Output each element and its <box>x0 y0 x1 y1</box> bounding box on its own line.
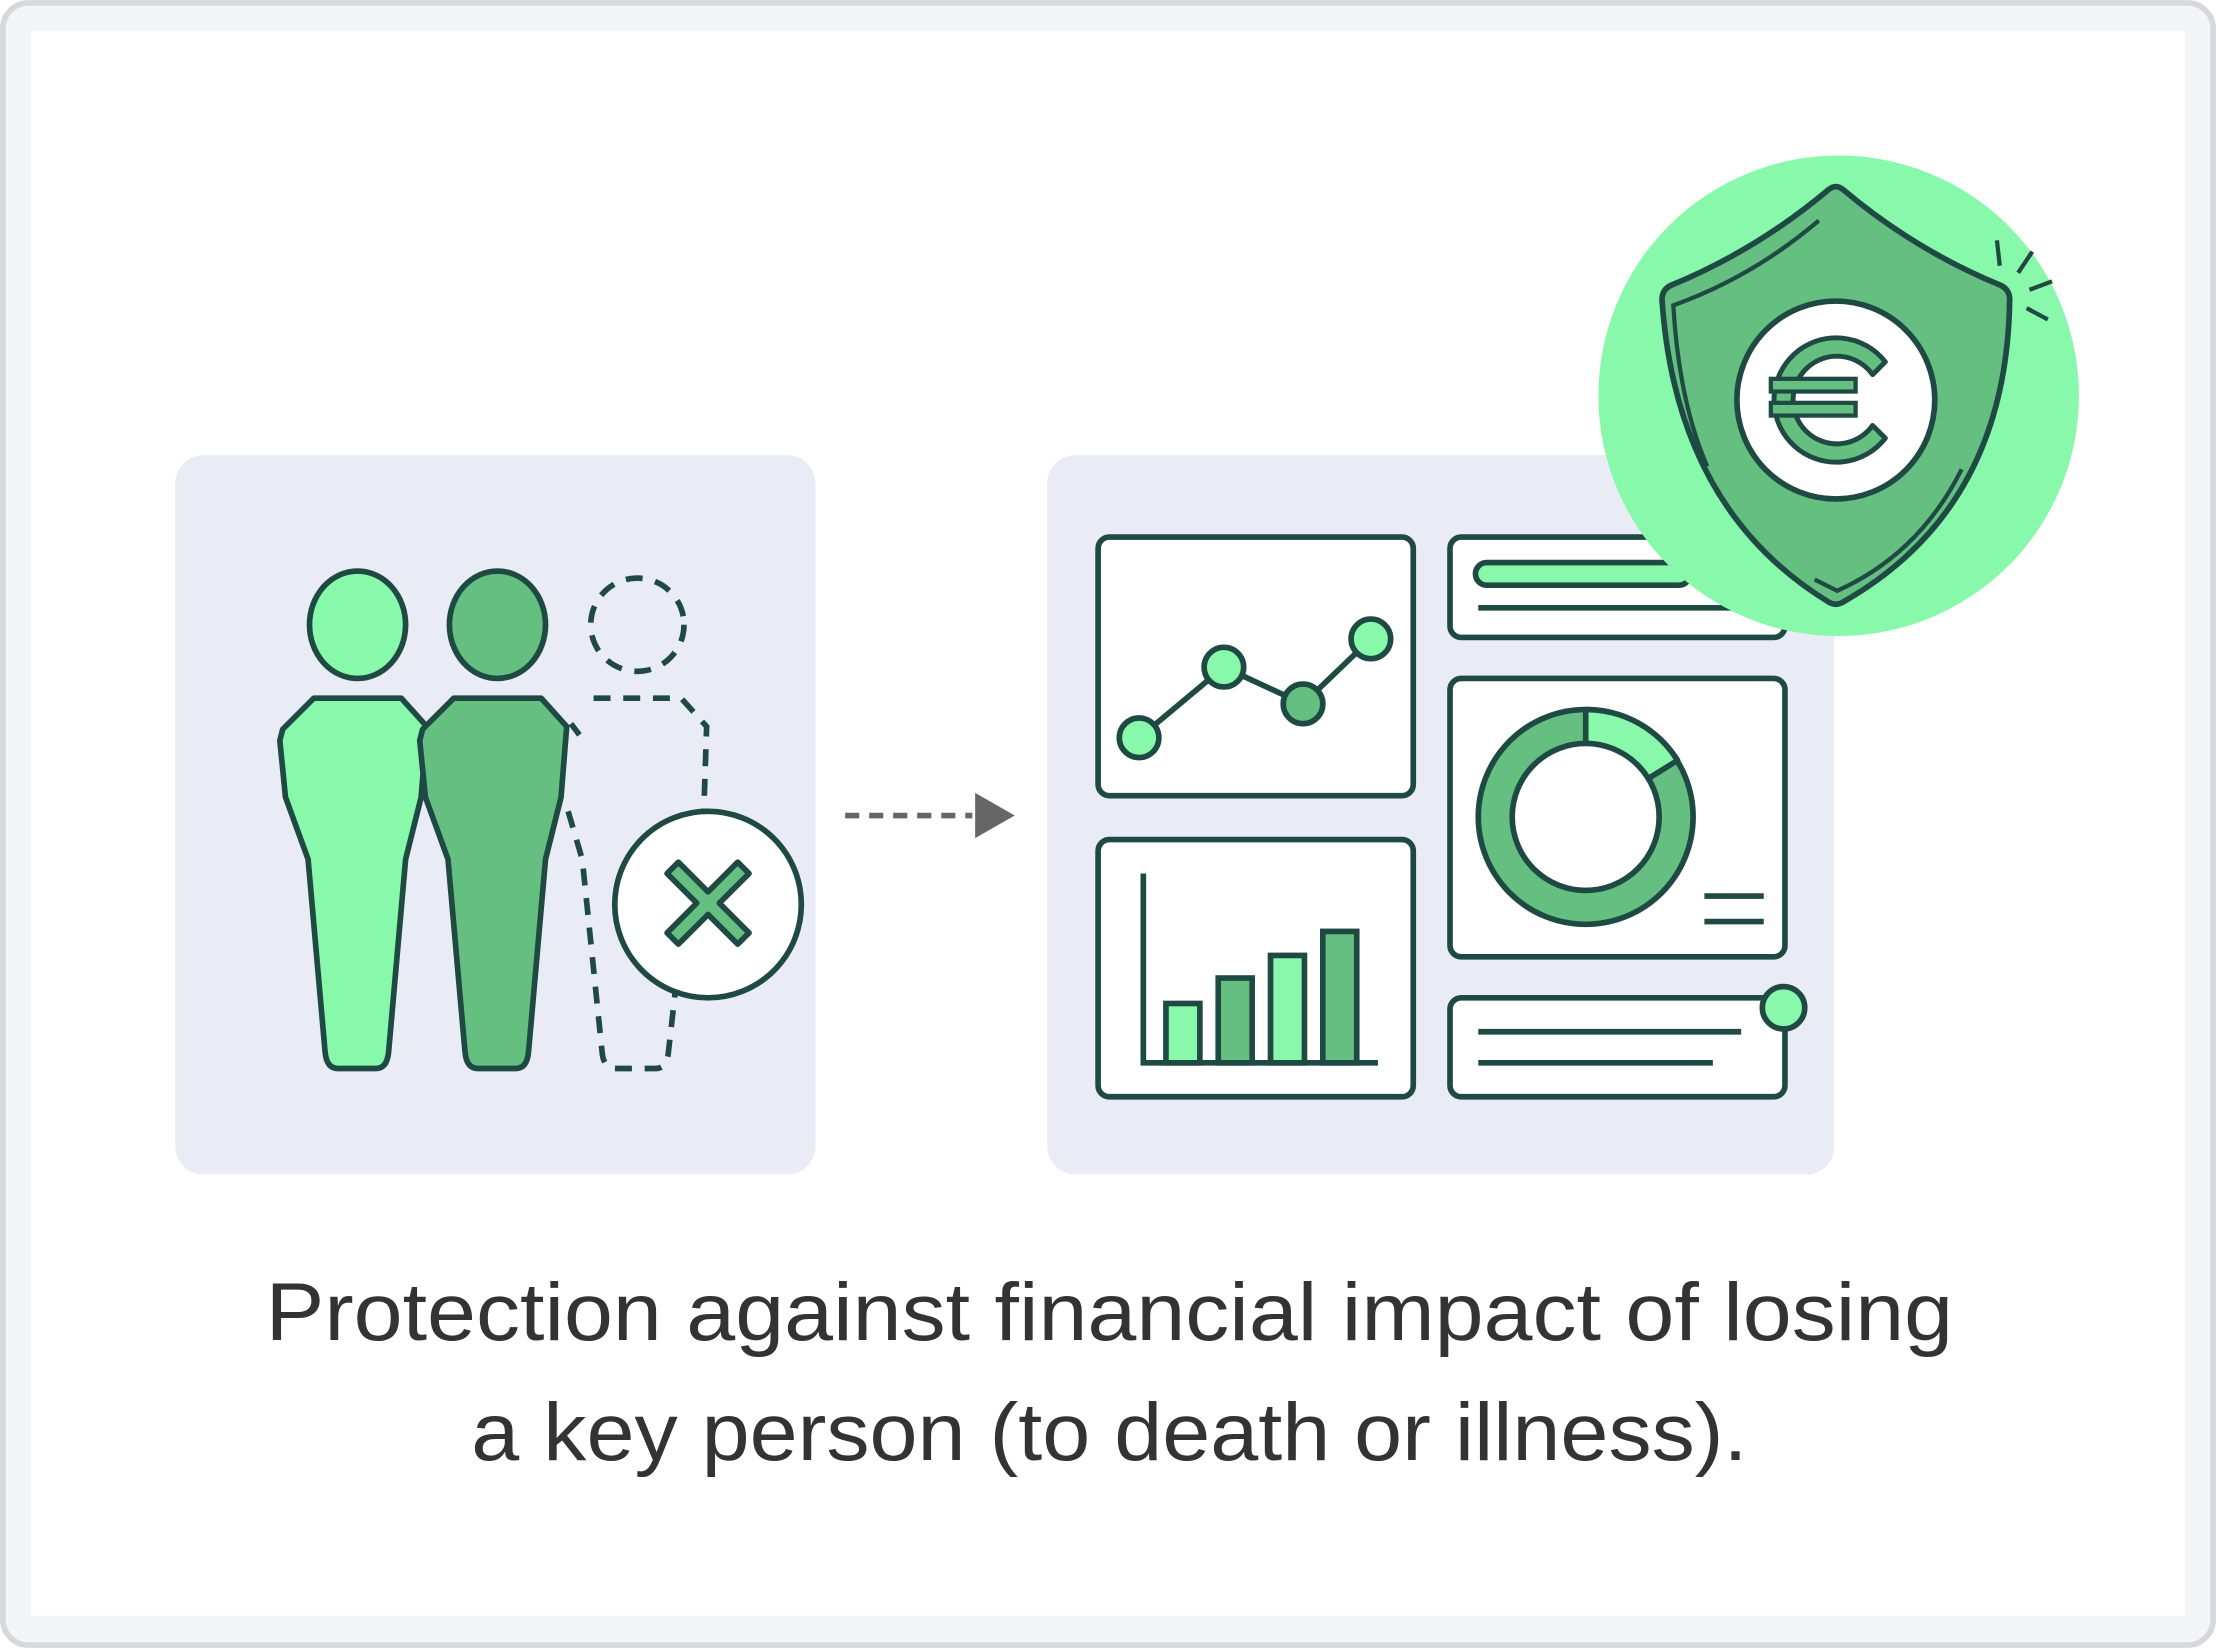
card: text lines with dot <box>1450 987 1805 1097</box>
card: bar chart <box>1098 840 1413 1097</box>
caption: a key person (to death or illness). <box>471 1387 1748 1478</box>
panel: team with lost key person <box>175 455 815 1174</box>
icon: missing person (dashed) <box>568 578 707 1068</box>
card: donut chart <box>1450 678 1785 957</box>
icon: removal X <box>615 811 801 998</box>
icon: person 2 <box>420 571 567 1068</box>
card: progress bar <box>1450 537 1785 637</box>
arrow <box>845 793 1015 838</box>
card: line chart <box>1098 537 1413 796</box>
panel: business dashboard <box>1047 455 1834 1174</box>
icon: person 1 <box>280 571 427 1068</box>
caption: Protection against financial impact of losing <box>266 1267 1953 1358</box>
caption <box>266 1267 1953 1478</box>
icon: shield with euro <box>1598 156 2079 636</box>
